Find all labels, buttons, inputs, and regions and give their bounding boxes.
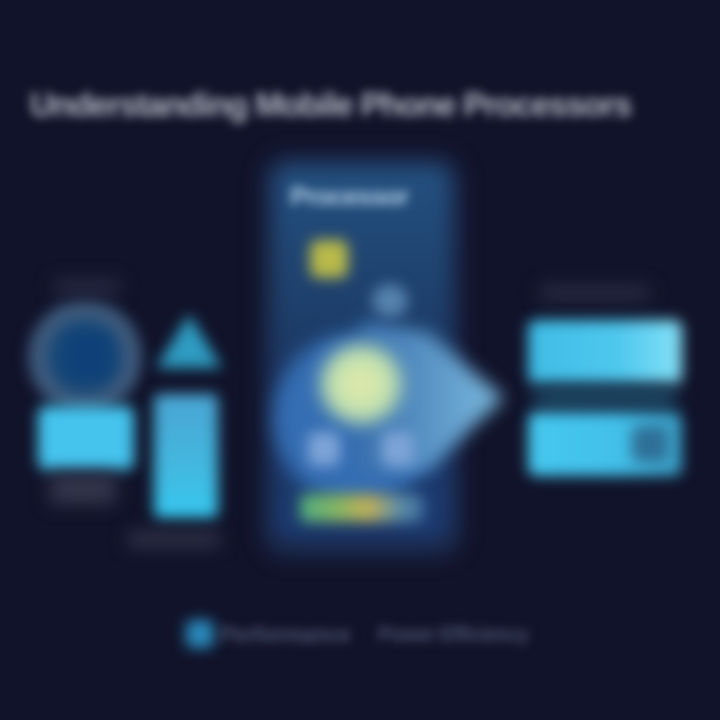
legend label two: Power Efficiency (378, 624, 528, 646)
gauge centre (66, 334, 110, 378)
connector band (534, 388, 676, 406)
phone body (260, 152, 464, 560)
triangle icon (150, 309, 228, 378)
yellow chip icon (310, 240, 348, 278)
large circular processor (274, 332, 440, 504)
left component group (20, 276, 229, 552)
lower output bar (528, 412, 682, 476)
right output group (516, 282, 694, 488)
lower bar icon (632, 426, 668, 462)
bar caption (128, 532, 220, 546)
card caption (50, 474, 116, 504)
right core icon (382, 432, 414, 466)
triangle shape (156, 314, 222, 368)
gauge label (54, 280, 120, 294)
upper output bar (528, 320, 682, 384)
legend swatch (186, 620, 214, 648)
tall cyan bar (154, 394, 218, 518)
phone screen (274, 166, 450, 540)
gauge ring (28, 300, 142, 414)
arrow shape (360, 320, 510, 470)
phone heading: Processor (290, 181, 408, 211)
colour status strip (300, 494, 424, 522)
cyan card (38, 406, 134, 470)
glowing core (320, 344, 402, 424)
arrow to outputs (354, 314, 513, 480)
phone (255, 147, 513, 565)
output heading (540, 286, 650, 300)
legend label one: Performance (220, 622, 350, 647)
small screen icon (372, 284, 408, 318)
left core icon (308, 432, 340, 466)
legend (176, 610, 530, 658)
title: Understanding Mobile Phone Processors (30, 86, 631, 123)
